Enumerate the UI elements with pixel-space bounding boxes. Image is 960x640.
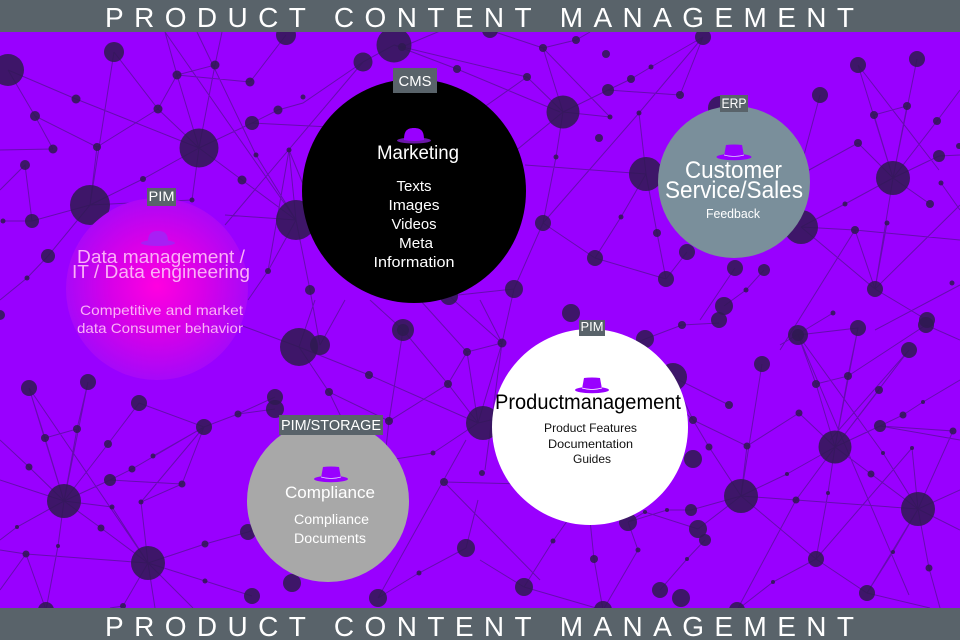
label: CMS xyxy=(393,68,437,93)
icon: hat xyxy=(314,466,348,482)
panel: customer service xyxy=(658,95,810,258)
icon: hat xyxy=(141,231,175,246)
text block xyxy=(294,512,369,546)
text block: data Consumer behavior xyxy=(77,320,243,336)
text block: Guides xyxy=(573,452,611,466)
text block: Images xyxy=(388,197,440,214)
heading: Service/Sales xyxy=(665,177,803,204)
text block: Feedback xyxy=(706,207,761,221)
text block: Compliance xyxy=(294,512,369,527)
heading: Data management / xyxy=(77,247,245,267)
icon: hat xyxy=(716,144,752,160)
heading: Productmanagement xyxy=(495,391,681,414)
text block xyxy=(77,302,243,336)
text block: Videos xyxy=(392,216,436,233)
text block: Competitive and market xyxy=(80,302,243,318)
panel: compliance xyxy=(247,415,409,582)
heading xyxy=(665,157,803,204)
text block xyxy=(544,421,637,466)
label: PIM: PIM xyxy=(580,319,604,334)
label: ERP: ERP xyxy=(722,95,746,111)
heading: Marketing xyxy=(377,143,459,164)
text block: Documents xyxy=(294,531,366,546)
label: CMS: CMS xyxy=(398,73,432,90)
text block: Information xyxy=(374,254,454,271)
icon: hat xyxy=(575,378,609,393)
label: PIM: PIM xyxy=(148,188,174,204)
text block: Documentation xyxy=(548,437,633,451)
heading: IT / Data engineering xyxy=(72,262,250,282)
text block: Texts xyxy=(396,178,432,195)
heading: Customer xyxy=(685,157,782,184)
heading: Compliance xyxy=(285,483,375,502)
header bar: PRODUCT CONTENT MANAGEMENT xyxy=(105,2,854,33)
text block: Meta xyxy=(399,235,434,252)
panel: PIM data management xyxy=(66,188,250,380)
heading xyxy=(72,247,250,282)
label: PIM/STORAGE: PIM/STORAGE xyxy=(281,417,381,434)
text block xyxy=(374,178,454,271)
text block: Product Features xyxy=(544,421,637,435)
panel: product management xyxy=(492,319,688,525)
panel: marketing xyxy=(302,68,526,303)
icon: hat xyxy=(397,128,431,144)
